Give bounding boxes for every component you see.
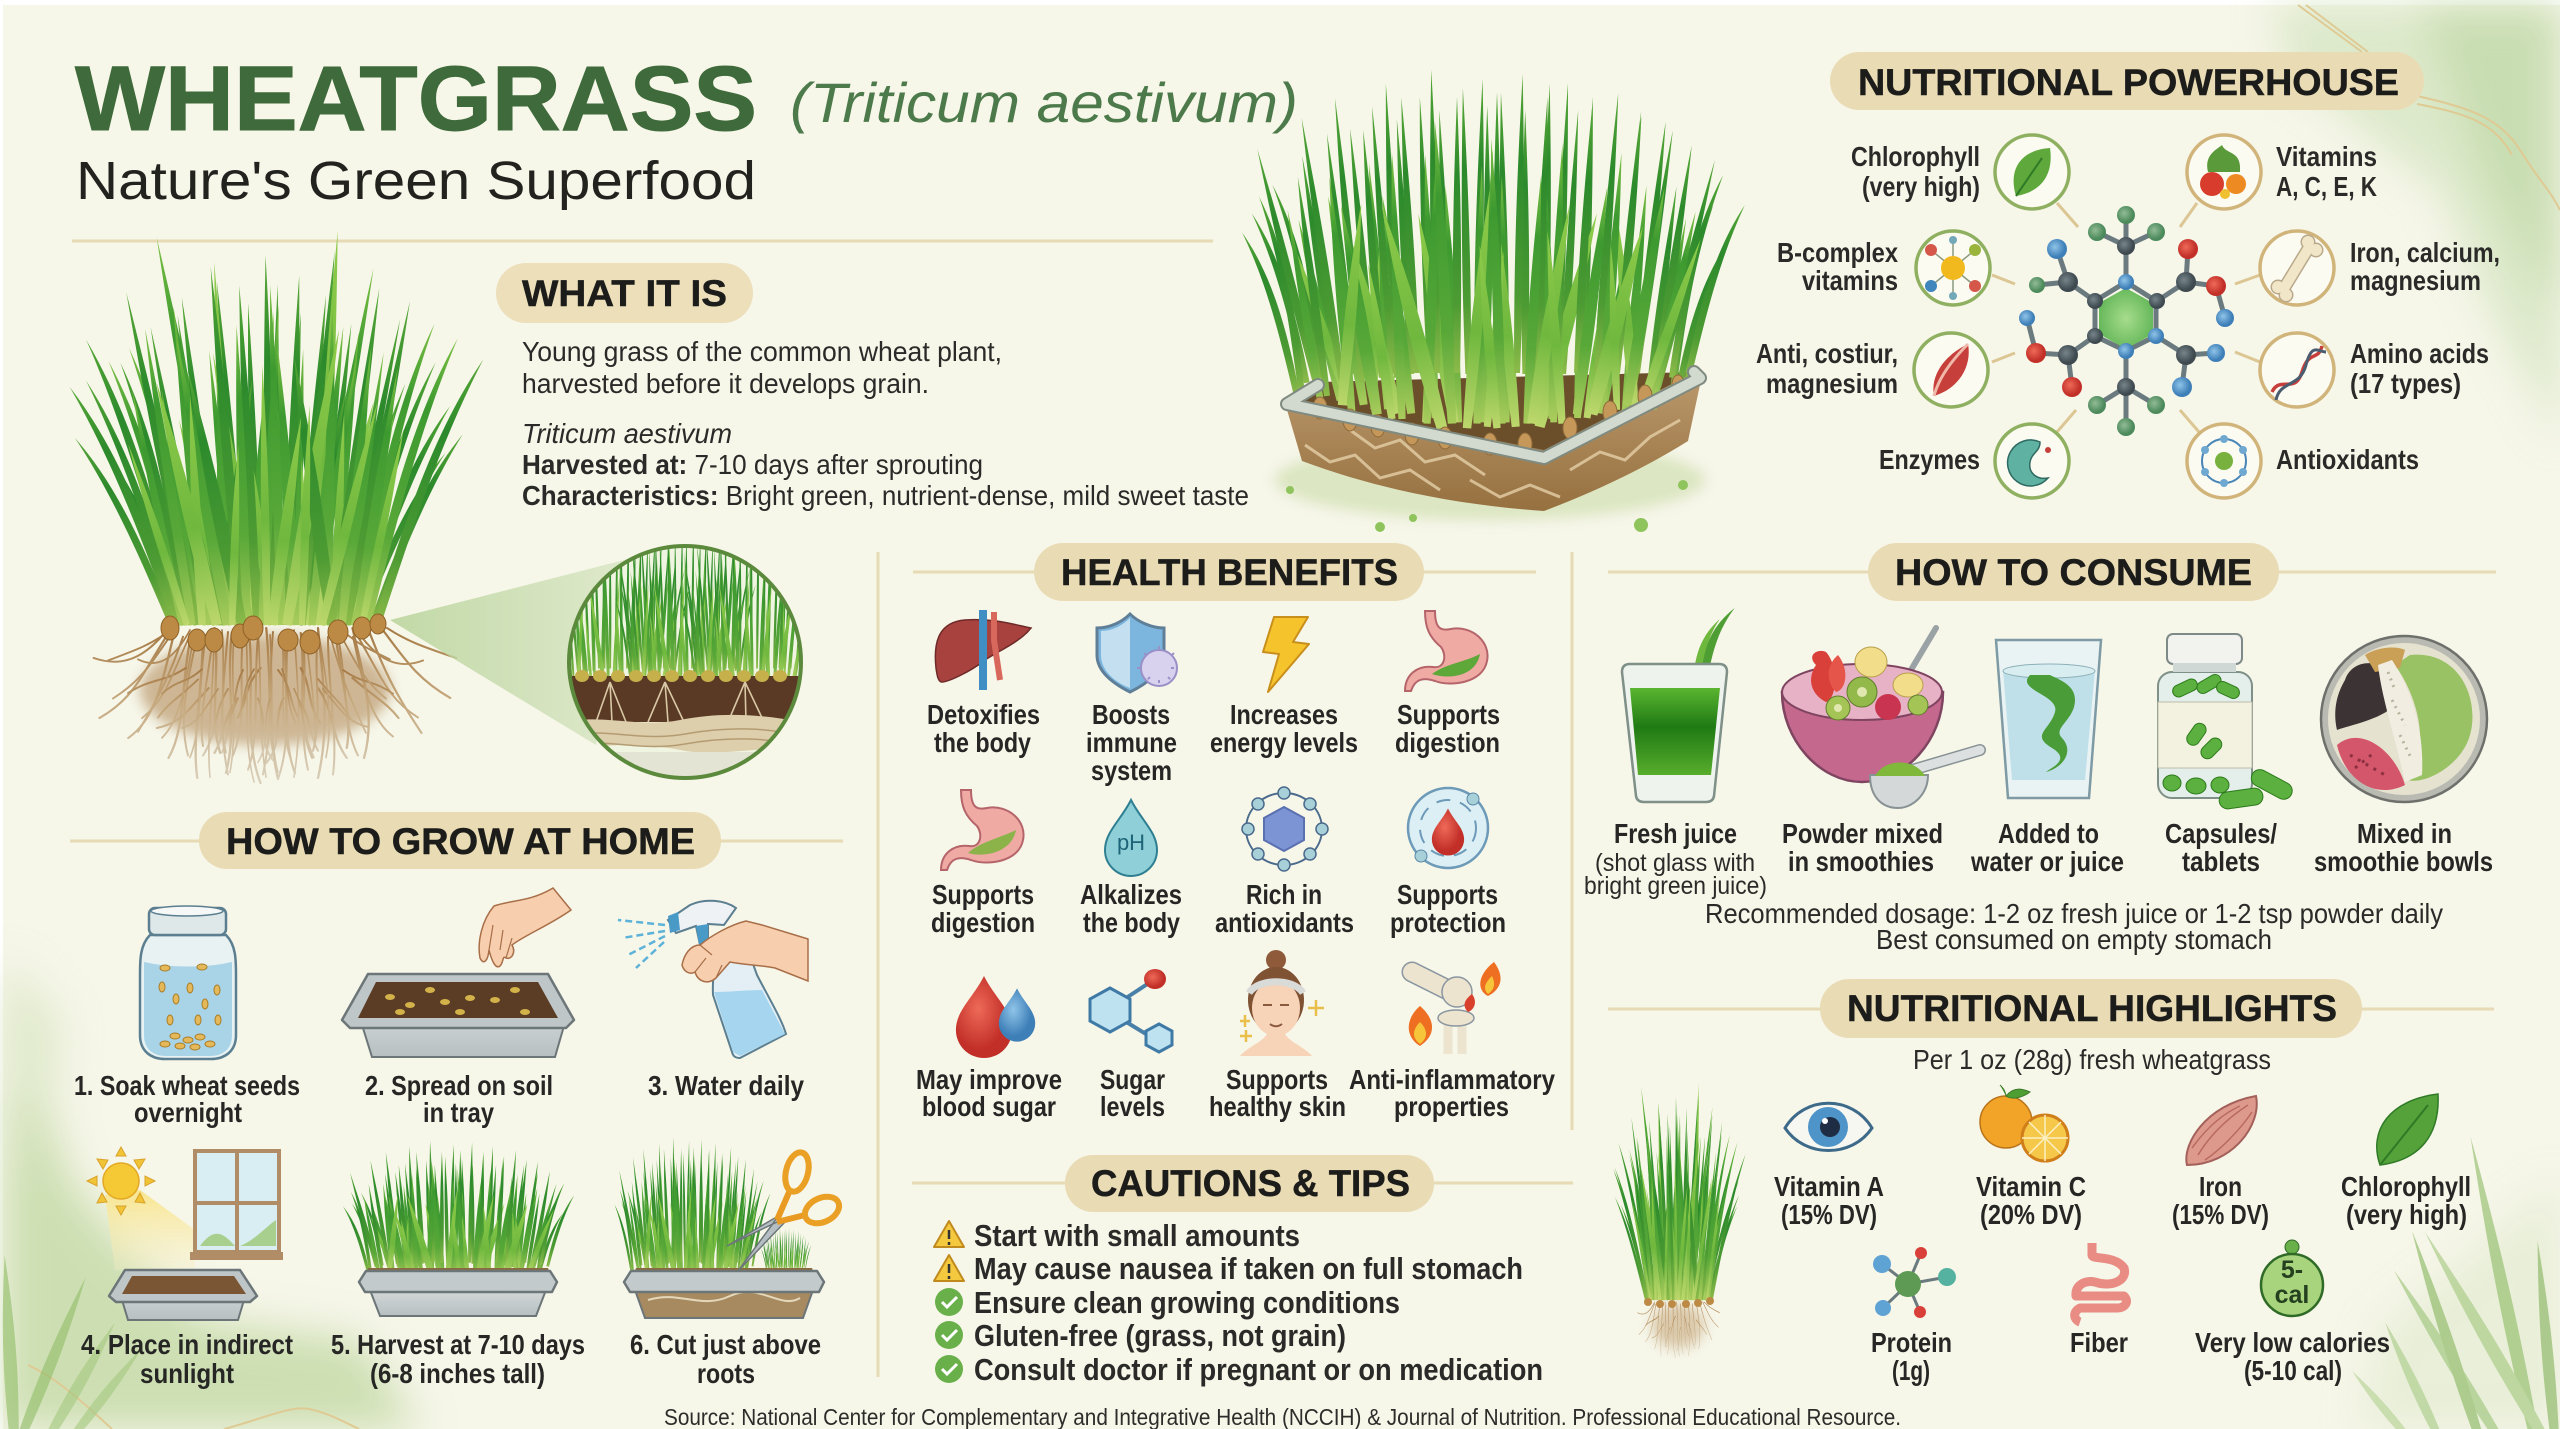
label: b-complex: vitamins <box>1802 265 1898 296</box>
item: fresh juice: Fresh juice <box>1614 818 1737 849</box>
dosage note: Recommended dosage: 1-2 oz fresh juice or 1-2 tsp powder daily <box>1705 898 2443 929</box>
nutrient: chlorophyll: Chlorophyll <box>2341 1171 2471 1202</box>
benefit: blood sugar: blood sugar <box>922 1091 1056 1122</box>
step 4: indirect sunlight <box>81 1147 293 1389</box>
nutrient: protein: (1g) <box>1892 1355 1930 1386</box>
benefit: alkalizes: Alkalizes <box>1080 879 1182 910</box>
molecule diagram <box>2019 206 2234 436</box>
label: amino acids: (17 types) <box>2350 368 2461 399</box>
benefit: antioxidants: antioxidants <box>1215 907 1354 938</box>
benefit: digestion: Supports <box>1397 699 1500 730</box>
callout cone to inset <box>390 559 628 745</box>
nutrient: vitamin a: (15% DV) <box>1781 1199 1877 1230</box>
step 5: harvest <box>331 1141 585 1389</box>
decorative grass: bottom left <box>0 1255 146 1429</box>
item: water or juice <box>1970 640 2124 877</box>
heading: nutritional highlights: NUTRITIONAL HIGHLIGHTS <box>1847 988 2337 1029</box>
benefit: energy <box>1210 617 1358 758</box>
item: smoothie bowl <box>2314 636 2493 877</box>
item: capsules <box>2158 634 2295 877</box>
nutrient: iron: Iron <box>2199 1171 2242 1202</box>
label: enzymes: Enzymes <box>1879 444 1980 475</box>
description text: harvested before it develops grain. <box>522 368 929 399</box>
label: vitamins <box>2276 141 2377 202</box>
label: b-complex <box>1777 237 1898 296</box>
heading: how to consume <box>1868 543 2279 601</box>
icon: bone <box>2260 231 2334 305</box>
benefit: detoxifies <box>927 610 1040 758</box>
step 5: harvest: 5. Harvest at 7-10 days <box>331 1329 585 1360</box>
nutrient: vitamin c: Vitamin C <box>1976 1171 2086 1202</box>
nutrient: vitamin a <box>1774 1103 1884 1230</box>
subtitle: Nature's Green Superfood <box>76 151 756 211</box>
description text: Harvested at: 7-10 days after sprouting <box>522 449 983 480</box>
heading: how to grow <box>199 812 721 869</box>
description text: Young grass of the common wheat plant, <box>522 336 1002 367</box>
benefit: digestion 2: Supports <box>932 879 1034 910</box>
heading: nutritional powerhouse: NUTRITIONAL POWERHOUSE <box>1858 62 2399 103</box>
inset circle: soil cross-section <box>567 544 803 780</box>
description text: Triticum aestivum <box>522 418 732 449</box>
label: anti, costiur, magnesium <box>1756 338 1898 399</box>
step 3: water daily <box>618 901 808 1101</box>
step 1: soak seeds: overnight <box>134 1097 242 1128</box>
heading: nutritional powerhouse <box>1830 52 2424 110</box>
item: fresh juice: (shot glass with <box>1595 849 1755 877</box>
panel: how to grow at home <box>70 812 843 1389</box>
label: anti, costiur, magnesium: magnesium <box>1766 368 1898 399</box>
benefit: anti-inflammatory <box>1349 962 1555 1122</box>
illustration: wheatgrass plant with roots <box>70 230 483 783</box>
dosage note: Best consumed on empty stomach <box>1876 924 2272 955</box>
item: fresh juice <box>1584 605 1767 900</box>
step 6: cut above roots: roots <box>697 1358 755 1389</box>
nutrient: vitamin c: (20% DV) <box>1980 1199 2082 1230</box>
check icon 1 <box>935 1288 963 1316</box>
step 4: indirect sunlight: 4. Place in indirect <box>81 1329 293 1360</box>
illustration: tray of wheatgrass <box>1242 69 1745 532</box>
nutrient: low calories <box>2195 1240 2390 1386</box>
label: anti, costiur, magnesium: Anti, costiur, <box>1756 338 1898 369</box>
panel: what it is <box>496 263 1249 511</box>
label: chlorophyll: Chlorophyll <box>1851 141 1980 172</box>
benefit: protection: protection <box>1390 907 1506 938</box>
nutrient: low calories: 5- <box>2281 1256 2303 1284</box>
per serving note: Per 1 oz (28g) fresh wheatgrass <box>1913 1044 2271 1075</box>
benefit: immune <box>1086 614 1181 786</box>
nutrient: fiber: Fiber <box>2070 1327 2128 1358</box>
item: powder in smoothies: Powder mixed <box>1782 818 1943 849</box>
tip 1: Start with small amounts <box>974 1218 1300 1253</box>
dosage note <box>1705 898 2443 955</box>
panel: nutritional powerhouse <box>1756 52 2500 498</box>
item: capsules: tablets <box>2182 846 2260 877</box>
benefit: alkalizes: the body <box>1083 907 1180 938</box>
nutrient: protein <box>1871 1247 1956 1386</box>
benefit: antioxidants: Rich in <box>1246 879 1322 910</box>
nutrient: low calories: (5-10 cal) <box>2244 1355 2342 1386</box>
step 4: indirect sunlight: sunlight <box>140 1358 234 1389</box>
icon: chlorophyll leaf <box>1995 135 2069 209</box>
benefit: digestion 2: digestion <box>931 907 1035 938</box>
benefit: healthy skin <box>1209 950 1346 1122</box>
benefit: healthy skin: Supports <box>1226 1064 1328 1095</box>
step 3: water daily: 3. Water daily <box>648 1070 804 1101</box>
benefit: healthy skin: healthy skin <box>1209 1091 1346 1122</box>
benefit: alkalizes: pH <box>1117 830 1145 855</box>
benefit: anti-inflammatory: Anti-inflammatory <box>1349 1064 1555 1095</box>
item: smoothie bowl: smoothie bowls <box>2314 846 2493 877</box>
step 5: harvest: (6-8 inches tall) <box>370 1358 545 1389</box>
warning icon 1 <box>934 1221 964 1247</box>
nutrient: low calories: Very low calories <box>2195 1327 2390 1358</box>
icon: antioxidants <box>2187 424 2261 498</box>
benefit: anti-inflammatory: properties <box>1394 1091 1509 1122</box>
nutrient: vitamin c <box>1976 1085 2086 1230</box>
item: water or juice: water or juice <box>1970 846 2124 877</box>
icon: b-complex <box>1916 231 1990 305</box>
benefit: sugar levels <box>1090 969 1172 1122</box>
check icon 3 <box>935 1355 963 1383</box>
nutrient: iron <box>2172 1096 2269 1230</box>
benefit: energy: Increases <box>1230 699 1338 730</box>
label: amino acids: Amino acids <box>2350 338 2489 369</box>
step 6: cut above roots: 6. Cut just above <box>630 1329 821 1360</box>
icon: dna <box>2260 333 2334 407</box>
label: iron, calcium, magnesium <box>2350 237 2500 296</box>
label: amino acids <box>2350 338 2489 399</box>
benefit: antioxidants <box>1215 787 1354 938</box>
label: iron, calcium, magnesium: Iron, calcium, <box>2350 237 2500 268</box>
benefit: immune: immune <box>1086 727 1177 758</box>
icon: vitamins <box>2187 135 2261 209</box>
nutrient: iron: (15% DV) <box>2172 1199 2269 1230</box>
item: fresh juice: bright green juice) <box>1584 872 1767 900</box>
check icon 2 <box>935 1321 963 1349</box>
heading: cautions: CAUTIONS & TIPS <box>1091 1163 1410 1204</box>
item: water or juice: Added to <box>1998 818 2099 849</box>
benefit: blood sugar: May improve <box>916 1064 1062 1095</box>
icon: muscle <box>1914 333 1988 407</box>
step 2: spread on soil <box>342 888 574 1128</box>
description text: Characteristics: Bright green, nutrient-dense, mild sweet taste <box>522 480 1249 511</box>
benefit: detoxifies: Detoxifies <box>927 699 1040 730</box>
label: vitamins: A, C, E, K <box>2276 171 2377 202</box>
nutrient: vitamin a: Vitamin A <box>1774 1171 1884 1202</box>
step 1: soak seeds: 1. Soak wheat seeds <box>74 1070 300 1101</box>
icon: enzyme <box>1995 424 2069 498</box>
benefit: immune: system <box>1091 755 1172 786</box>
label: vitamins: Vitamins <box>2276 141 2377 172</box>
connector lines <box>1992 203 2260 432</box>
illustration: small wheatgrass plant <box>1613 1083 1746 1358</box>
nutrient: chlorophyll <box>2341 1094 2471 1230</box>
heading: what it is: WHAT IT IS <box>522 273 727 314</box>
benefit: blood sugar <box>916 976 1062 1122</box>
description text <box>522 336 1249 511</box>
title <box>75 48 1298 211</box>
benefit: sugar levels: levels <box>1100 1091 1165 1122</box>
main heading: WHEATGRASS <box>75 48 757 150</box>
benefit: energy: energy levels <box>1210 727 1358 758</box>
benefit: digestion 2 <box>931 790 1035 938</box>
heading: health benefits: HEALTH BENEFITS <box>1061 552 1398 593</box>
heading: nutritional highlights <box>1820 979 2362 1038</box>
warning icon 2 <box>934 1255 964 1281</box>
panel: how to consume <box>1584 543 2496 955</box>
benefit: detoxifies: the body <box>934 727 1031 758</box>
latin name: (Triticum aestivum) <box>790 71 1298 134</box>
nutrient: low calories: cal <box>2275 1281 2309 1309</box>
benefit: immune: Boosts <box>1092 699 1170 730</box>
label: chlorophyll <box>1851 141 1980 202</box>
benefit: digestion <box>1395 611 1500 758</box>
panel: nutritional highlights <box>1608 979 2494 1386</box>
benefit: protection <box>1390 788 1506 938</box>
panel: cautions and tips <box>912 1155 1573 1387</box>
decorative grass: bottom right <box>2349 1135 2560 1429</box>
step 2: spread on soil: 2. Spread on soil <box>365 1070 553 1101</box>
label: antioxidants: Antioxidants <box>2276 444 2419 475</box>
label: iron, calcium, magnesium: magnesium <box>2350 265 2481 296</box>
heading: how to grow: HOW TO GROW AT HOME <box>226 821 695 862</box>
heading: what it is <box>496 263 753 323</box>
step 2: spread on soil: in tray <box>423 1097 494 1128</box>
label: b-complex: B-complex <box>1777 237 1898 268</box>
nutrient: chlorophyll: (very high) <box>2346 1199 2467 1230</box>
heading: cautions <box>1065 1155 1434 1212</box>
nutrient: protein: Protein <box>1871 1327 1952 1358</box>
item: capsules: Capsules/ <box>2165 818 2277 849</box>
item: smoothie bowl: Mixed in <box>2357 818 2452 849</box>
heading: health benefits <box>1034 543 1424 601</box>
label: chlorophyll: (very high) <box>1862 171 1980 202</box>
benefit: digestion: digestion <box>1395 727 1500 758</box>
item: powder in smoothies: in smoothies <box>1788 846 1934 877</box>
step 1: soak seeds <box>74 906 300 1128</box>
benefit: sugar levels: Sugar <box>1100 1064 1165 1095</box>
benefit: alkalizes <box>1080 800 1182 938</box>
tip 4: Gluten-free (grass, not grain) <box>974 1318 1346 1353</box>
tip 2: May cause nausea if taken on full stomach <box>974 1251 1523 1286</box>
heading: how to consume: HOW TO CONSUME <box>1895 552 2252 593</box>
nutrient: fiber <box>2070 1243 2128 1358</box>
tip 5: Consult doctor if pregnant or on medication <box>974 1352 1543 1387</box>
step 6: cut above roots <box>615 1137 843 1389</box>
tip 3: Ensure clean growing conditions <box>974 1285 1400 1320</box>
benefit: protection: Supports <box>1397 879 1498 910</box>
panel: health benefits <box>913 543 1555 1122</box>
item: powder in smoothies <box>1782 628 1980 877</box>
